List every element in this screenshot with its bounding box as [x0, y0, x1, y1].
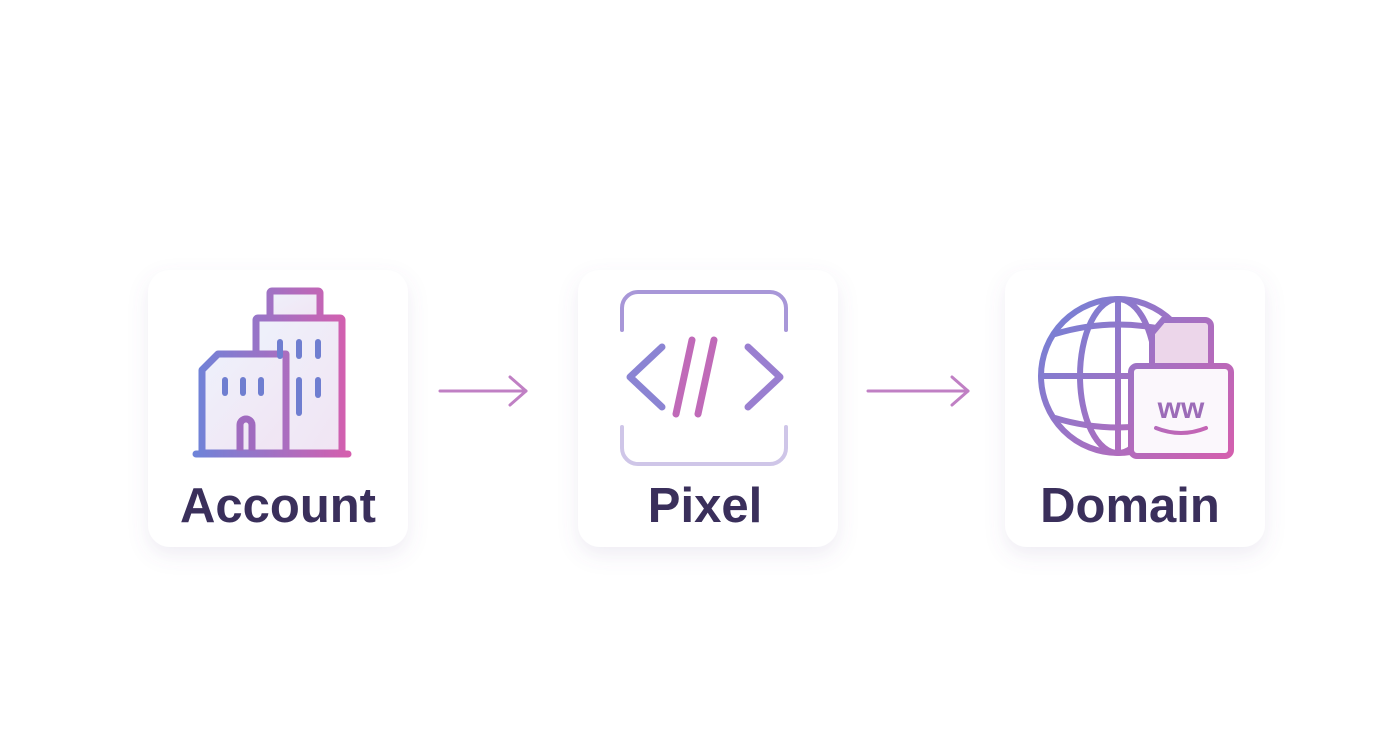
icon: building — [196, 291, 348, 454]
label: Domain: Domain — [1040, 479, 1220, 533]
card: domain — [1005, 270, 1265, 547]
arrow 1 — [440, 377, 526, 405]
icon: globe with www tag: ww — [1157, 392, 1205, 425]
icon: code brackets — [622, 292, 786, 464]
arrow 2 — [868, 377, 968, 405]
card: pixel — [578, 270, 838, 547]
label: Account: Account — [180, 479, 376, 533]
card: account — [148, 270, 408, 547]
icon: globe with www tag — [1041, 299, 1231, 456]
label: Pixel: Pixel — [648, 479, 762, 533]
